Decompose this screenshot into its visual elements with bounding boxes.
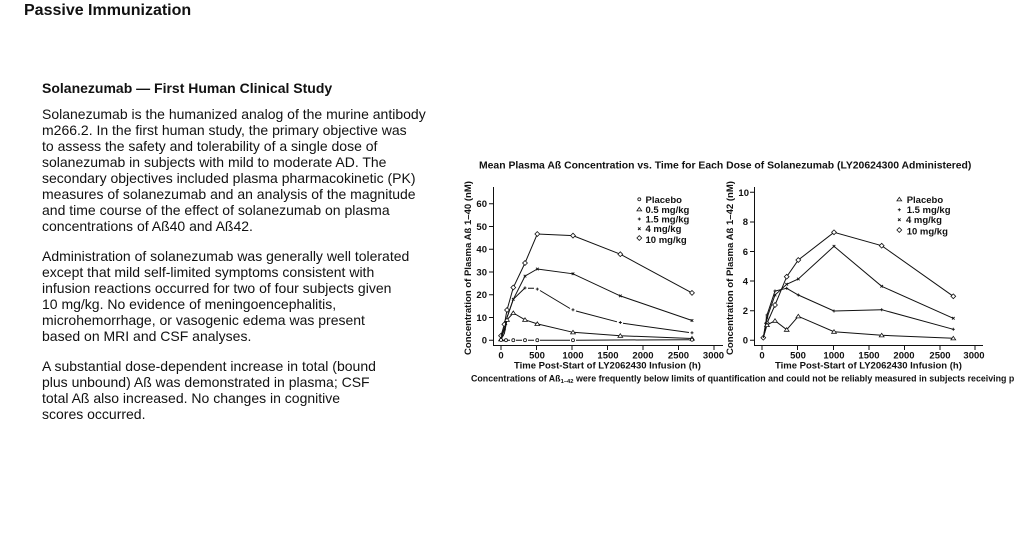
legend: [897, 195, 951, 238]
text block: tolerability: 10 mg/kg. No evidence of meningoencephalitis,: [42, 296, 336, 312]
series: 4 mg/kg: [763, 245, 955, 338]
y axis numbers: [738, 188, 749, 346]
text block: tolerability: Administration of solanezumab was generally well tolerated: [42, 248, 409, 264]
y axis numbers: 50: [476, 222, 487, 233]
text block: study description: m266.2. In the first human study, the primary objective was: [42, 122, 407, 138]
text block: study description: and time course of the effect of solanezumab on plasma: [42, 202, 390, 218]
axes: [494, 187, 723, 346]
text block: study description: measures of solanezumab and an analysis of the magnitude: [42, 186, 416, 202]
text block: biomarker results: scores occurred.: [42, 406, 145, 422]
text block: tolerability: [42, 248, 409, 344]
series: 1.5 mg/kg: [501, 286, 694, 338]
text block: biomarker results: total Aß also increased. No changes in cognitive: [42, 390, 340, 406]
x axis title: Time Post-Start of LY2062430 Infusion (h): [514, 360, 701, 371]
series: 10 mg/kg: [761, 230, 956, 340]
chart: plasma Aß 1-40: [463, 181, 724, 371]
text block: study description: solanezumab in subjects with mild to moderate AD. The: [42, 154, 386, 170]
y axis numbers: 30: [476, 268, 487, 278]
text block: tolerability: microhemorrhage, or vasogenic edema was present: [42, 312, 365, 328]
x axis numbers: 0: [759, 350, 765, 362]
subheading: Solanezumab — First Human Clinical Study: [42, 80, 332, 96]
x axis numbers: 1000: [562, 350, 584, 362]
text block: tolerability: based on MRI and CSF analyses.: [42, 328, 251, 344]
x axis numbers: 2000: [893, 350, 915, 362]
footnote: 1–42: [561, 379, 574, 385]
y axis numbers: 2: [743, 306, 748, 317]
text block: biomarker results: plus unbound) Aß was demonstrated in plasma; CSF: [42, 374, 370, 390]
chart: plasma Aß 1-42: [725, 181, 985, 371]
y axis title: Concentration of Plasma Aß 1–42 (nM): [725, 181, 736, 355]
legend: 4 mg/kg: [906, 215, 942, 226]
legend: 4 mg/kg: [646, 224, 682, 235]
legend: Placebo: [646, 195, 682, 206]
x axis numbers: 3000: [963, 350, 985, 362]
x axis numbers: 2500: [668, 350, 689, 362]
y axis numbers: 40: [476, 244, 487, 256]
x axis numbers: 1500: [858, 350, 880, 362]
y axis numbers: 0: [743, 336, 748, 346]
legend: 10 mg/kg: [646, 235, 687, 246]
series: placebo: [763, 314, 956, 340]
text block: biomarker results: A substantial dose-dependent increase in total (bound: [42, 358, 376, 374]
series: 1.5 mg/kg: [763, 287, 955, 338]
y axis numbers: 0: [482, 336, 487, 346]
text block: study description: to assess the safety and tolerability of a single dose of: [42, 138, 377, 154]
y axis numbers: 10: [476, 313, 487, 324]
legend: 10 mg/kg: [907, 226, 948, 238]
series: 4 mg/kg: [501, 268, 693, 336]
legend: 0.5 mg/kg: [646, 205, 690, 216]
text block: study description: concentrations of Aß40 and Aß42.: [42, 218, 253, 234]
series: 0.5 mg/kg: [499, 311, 694, 341]
text block: study description: [42, 106, 426, 234]
x axis numbers: 2000: [632, 350, 654, 362]
x axis numbers: 2500: [929, 350, 951, 362]
axes: [754, 187, 983, 346]
y axis numbers: 4: [743, 276, 749, 288]
y axis numbers: 6: [743, 247, 748, 258]
x axis numbers: 1500: [597, 350, 619, 362]
x axis numbers: [498, 350, 724, 362]
x axis numbers: 500: [790, 350, 806, 362]
legend: 1.5 mg/kg: [646, 214, 690, 226]
title: Passive Immunization: [24, 2, 191, 19]
x axis numbers: [759, 350, 985, 362]
y axis numbers: 20: [476, 290, 487, 301]
legend: [637, 195, 690, 246]
y axis title: Concentration of Plasma Aß 1–40 (nM): [463, 181, 474, 355]
x axis numbers: 500: [529, 350, 545, 362]
x axis numbers: 0: [498, 350, 504, 362]
text block: tolerability: infusion reactions occurred for two of four subjects given: [42, 280, 391, 296]
x axis numbers: 3000: [703, 350, 724, 362]
text block: tolerability: except that mild self-limited symptoms consistent with: [42, 264, 374, 280]
ticks: [489, 204, 714, 350]
text block: study description: Solanezumab is the humanized analog of the murine antibody: [42, 106, 426, 122]
y axis numbers: [476, 199, 487, 346]
x axis numbers: 1000: [823, 350, 845, 362]
chart heading: Mean Plasma Aß Concentration vs. Time for Each Dose of Solanezumab (LY20624300 Administered): [479, 160, 971, 171]
legend: Placebo: [907, 195, 943, 206]
legend: 1.5 mg/kg: [907, 205, 951, 216]
y axis numbers: 10: [738, 188, 749, 199]
text block: study description: secondary objectives included plasma pharmacokinetic (PK): [42, 170, 416, 186]
y axis numbers: 8: [743, 217, 748, 228]
y axis numbers: 60: [476, 199, 487, 210]
ticks: [750, 192, 975, 350]
x axis title: Time Post-Start of LY2062430 Infusion (h): [775, 360, 962, 371]
series: placebo: [500, 338, 694, 342]
series: 10 mg/kg: [499, 232, 694, 338]
footnote: Concentrations of Aß: [471, 374, 561, 384]
text block: biomarker results: [42, 358, 376, 422]
